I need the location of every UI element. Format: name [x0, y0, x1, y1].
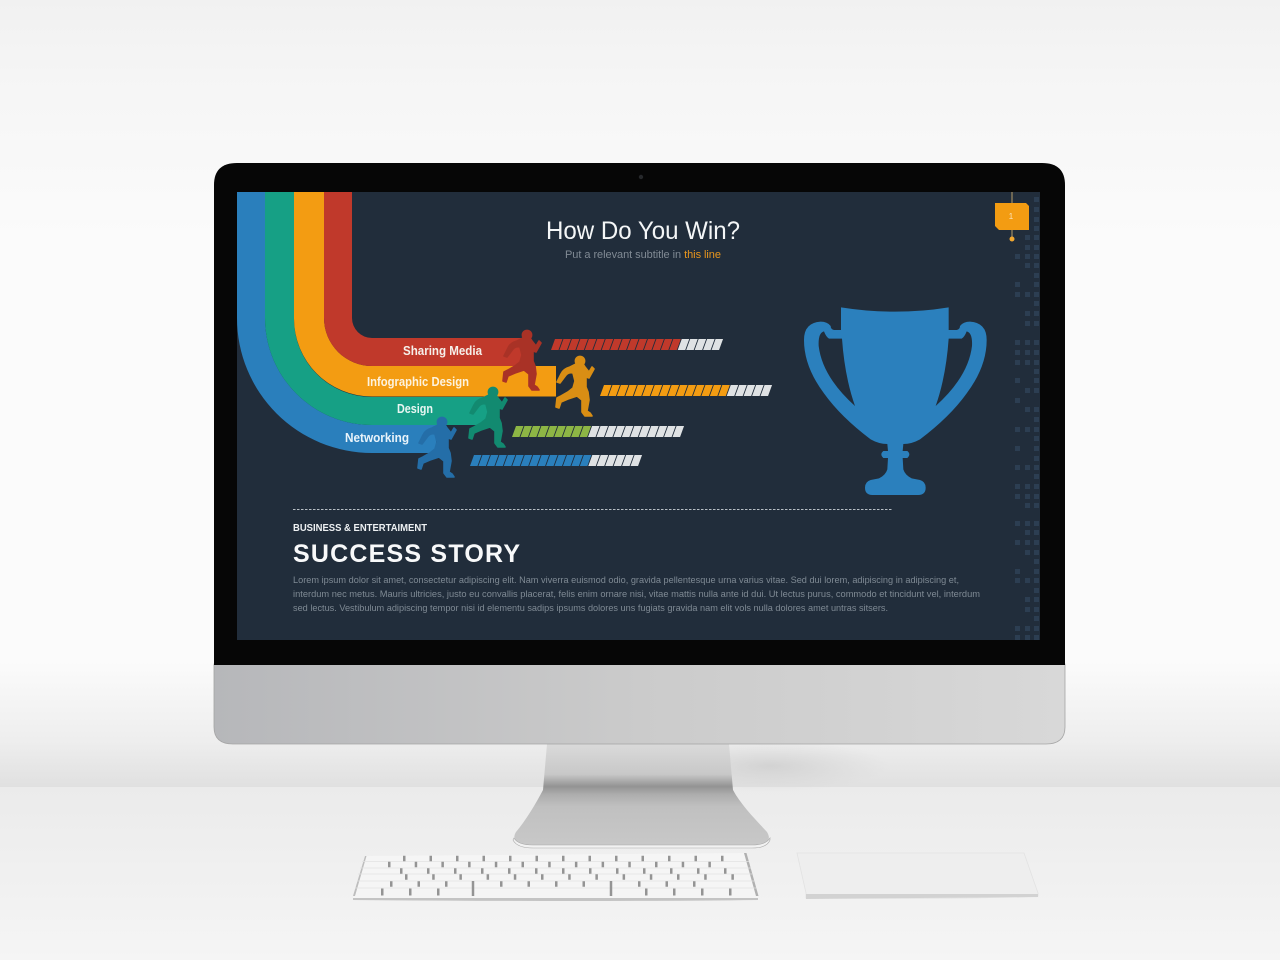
- progress bar: sharing media: [553, 339, 722, 350]
- band: sharing media (red): [324, 192, 522, 366]
- camera: [639, 175, 643, 179]
- monitor stand: [513, 744, 770, 848]
- page tag with pin: 1: [1009, 212, 1014, 221]
- section eyebrow: BUSINESS & ENTERTAIMENT: [293, 522, 428, 534]
- label: Sharing Media: Sharing Media: [403, 344, 483, 358]
- runner: green: [469, 387, 507, 447]
- slide screen: [237, 192, 1040, 640]
- subtitle: Put a relevant subtitle in this line: [565, 249, 721, 261]
- body paragraph: [293, 575, 980, 614]
- monitor bezel: [214, 163, 1065, 665]
- progress bar: infographic design: [602, 385, 771, 396]
- shadow behind stand: [650, 740, 890, 792]
- rainbow track bands: [237, 192, 556, 453]
- runner: blue: [418, 417, 456, 477]
- icon: trophy: [804, 307, 987, 495]
- band: networking (blue): [237, 192, 436, 453]
- label: Design: Design: [397, 402, 433, 416]
- decorative dot grid: [1015, 197, 1039, 640]
- trackpad: [797, 853, 1038, 899]
- band: infographic design (orange): [294, 192, 556, 396]
- progress bar: design: [514, 426, 683, 437]
- background: table: [0, 787, 1280, 960]
- section heading: SUCCESS STORY: [293, 540, 520, 568]
- body paragraph: Lorem ipsum dolor sit amet, consectetur adipiscing elit. Nam viverra euismod odio, gravida pellentesque urna varius vitae. Sed dui lorem, adipiscing in adipiscing et,: [293, 575, 959, 586]
- keyboard: [353, 853, 758, 901]
- page tag with pin: [995, 192, 1029, 242]
- body paragraph: sed lectus. Vestibulum adipiscing tempor nisi id elementu sadips ipsums dolores uns fugiats gravida nam elit vols nulla dolores amet untras sitsers.: [293, 603, 888, 614]
- body paragraph: interdum nec metus. Mauris ultricies, justo eu convallis placerat, felis enim ornare nisi, vitae mattis nulla ante id dui. Ut lectus purus, commodo et tincidunt vel, interdum: [293, 589, 980, 600]
- runner: red: [503, 330, 541, 390]
- progress bar: networking: [472, 455, 641, 466]
- label: Infographic Design: Infographic Design: [367, 375, 469, 389]
- band: design (green): [265, 192, 488, 425]
- dashed divider: [293, 508, 893, 510]
- title: How Do You Win?: [546, 217, 740, 245]
- runner: orange: [556, 356, 594, 416]
- monitor chin: [214, 664, 1065, 744]
- label: Networking: Networking: [345, 431, 409, 445]
